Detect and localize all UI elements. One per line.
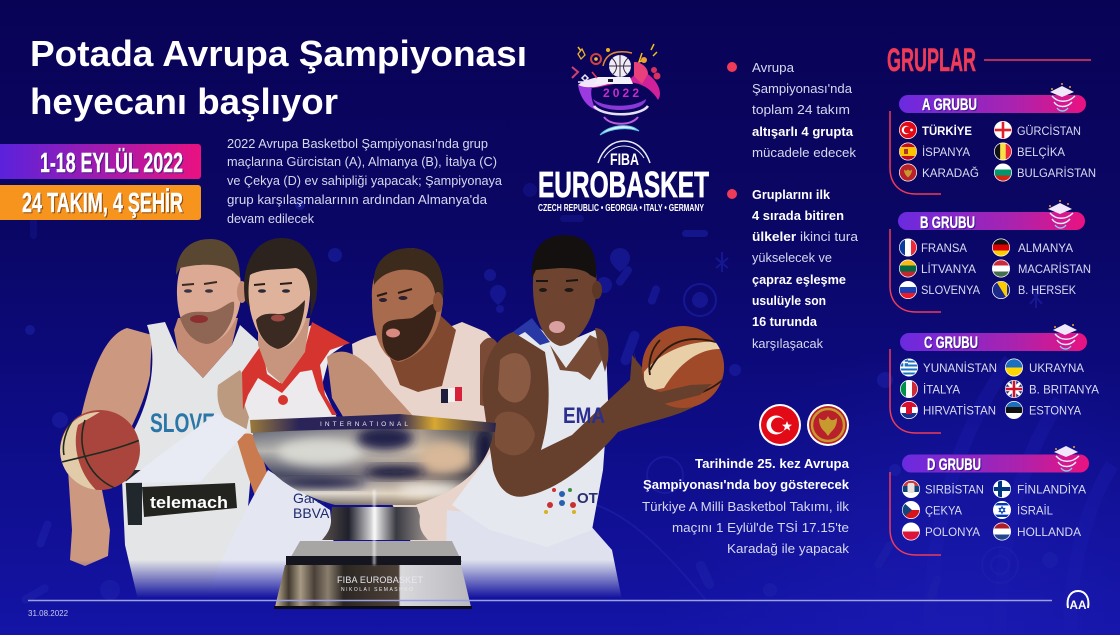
- date banner: [0, 144, 201, 179]
- logo text: EUROBASKET: [538, 164, 709, 205]
- team: Ukrayna: [1005, 358, 1084, 376]
- group C header: [900, 324, 1087, 352]
- team: B. Britanya: [1005, 380, 1099, 398]
- team: Macaristan: [992, 260, 1091, 278]
- team: Türkiye: [899, 121, 972, 139]
- team: Gürcistan: GÜRCİSTAN: [1017, 124, 1081, 138]
- team: Hırvatistan: [900, 401, 996, 419]
- jersey text: Garanti BBVA: BBVA: [293, 505, 330, 521]
- player: Gobert: [352, 248, 502, 560]
- title: [30, 33, 527, 122]
- trophy inscription: FIBA EUROBASKET: [337, 575, 424, 585]
- panel: group C: [890, 324, 1099, 433]
- group D header: D GRUBU: [927, 455, 981, 474]
- jersey text: SLOVE: [150, 408, 215, 438]
- team: Karadağ: [899, 164, 979, 182]
- team: Yunanistan: YUNANİSTAN: [923, 361, 997, 375]
- icon: Turkey flag: [759, 404, 801, 446]
- team: Polonya: POLONYA: [925, 525, 980, 539]
- logo mark: [572, 44, 660, 135]
- bullet text: second round: çapraz eşleşme: [752, 273, 846, 287]
- team: Bulgaristan: BULGARİSTAN: [1017, 166, 1096, 180]
- team: Litvanya: LİTVANYA: [921, 262, 976, 276]
- player: Antetokounmpo: OT: [577, 490, 598, 507]
- team: Almanya: ALMANYA: [1018, 241, 1073, 255]
- icon: AA logo: [1068, 591, 1088, 612]
- team: Litvanya: [899, 260, 976, 278]
- intro text: 2022 Avrupa Basketbol Şampiyonası'nda grup: [227, 137, 488, 151]
- sponsor dots: [544, 488, 576, 514]
- bullet text: second round: ülkeler ikinci tura: [752, 230, 858, 244]
- team: Bulgaristan: [994, 164, 1096, 182]
- intro text: grup karşılaşmalarının ardından Almanya'da: [227, 193, 487, 207]
- heading: groups: GRUPLAR: [887, 42, 976, 78]
- team: Hollanda: HOLLANDA: [1017, 525, 1081, 539]
- bullet text: second round: [727, 188, 858, 351]
- bullet text: second round: karşılaşacak: [752, 337, 824, 351]
- group C header: C GRUBU: [924, 333, 978, 352]
- match text: Tarihinde 25. kez Avrupa: [695, 457, 850, 471]
- sponsor band: telemach: [142, 483, 237, 517]
- team: Türkiye: TÜRKİYE: [922, 123, 972, 138]
- sponsor band: telemach: telemach: [150, 493, 228, 512]
- match text: [642, 457, 850, 556]
- title: heyecanı başlıyor: [30, 81, 338, 122]
- date banner: 1-18 EYLÜL 2022: [40, 147, 183, 178]
- group B header: [898, 200, 1085, 232]
- logo text: FIBA: [610, 151, 639, 169]
- team: Ukrayna: UKRAYNA: [1029, 361, 1084, 375]
- team: Macaristan: MACARİSTAN: [1018, 262, 1091, 276]
- bullet text: format: toplam 24 takım: [752, 103, 850, 117]
- group D header: [902, 446, 1089, 474]
- match text: maçını 1 Eylül'de TSİ 17.15'te: [672, 521, 849, 535]
- logo mark: 2022: [603, 86, 639, 100]
- team: Belçika: [994, 142, 1065, 160]
- basketball: right: [632, 326, 725, 410]
- bullet text: format: [727, 61, 857, 160]
- teams and cities banner: 24 TAKIM, 4 ŞEHİR: [22, 187, 183, 218]
- team: Almanya: [992, 238, 1073, 256]
- logo text: [538, 151, 709, 214]
- team: Polonya: [902, 522, 980, 540]
- team: Slovenya: SLOVENYA: [921, 283, 980, 297]
- player: Osman: [124, 238, 415, 600]
- group A header: [899, 83, 1086, 114]
- team: Karadağ: KARADAĞ: [922, 165, 979, 180]
- group B header: B GRUBU: [920, 213, 975, 232]
- team: Çekya: ÇEKYA: [925, 504, 962, 518]
- jersey text: Garanti BBVA: Gara: [293, 490, 324, 506]
- team: İtalya: [900, 380, 960, 398]
- team: Gürcistan: [994, 121, 1081, 139]
- team: İspanya: İSPANYA: [922, 145, 970, 159]
- team: Çekya: [902, 501, 962, 519]
- group A header: A GRUBU: [922, 95, 977, 114]
- bullet text: second round: 16 turunda: [752, 315, 818, 329]
- team: İtalya: İTALYA: [923, 382, 960, 396]
- team: Sırbistan: SIRBİSTAN: [925, 482, 984, 496]
- match text: Karadağ ile yapacak: [727, 542, 850, 556]
- player: Doncic: [68, 239, 262, 600]
- intro text: ve Çekya (D) ev sahipliği yapacak; Şampiyonaya: [227, 174, 502, 188]
- match text: Şampiyonası'nda boy gösterecek: [643, 478, 849, 492]
- team: İsrail: İSRAİL: [1017, 504, 1053, 518]
- bullet text: format: mücadele edecek: [752, 146, 857, 160]
- team: Estonya: [1005, 401, 1081, 419]
- jersey text: EMA: [563, 403, 605, 428]
- team: Slovenya: [899, 281, 980, 299]
- bullet text: format: Avrupa: [752, 61, 794, 75]
- team: İsrail: [993, 501, 1053, 519]
- team: Hollanda: [993, 522, 1081, 540]
- icon: Montenegro flag: [807, 404, 849, 446]
- bullet text: second round: yükselecek ve: [752, 251, 832, 265]
- trophy inscription: INTERNATIONAL: [320, 421, 410, 428]
- intro text: maçlarına Gürcistan (A), Almanya (B), İtalya (C): [227, 155, 497, 169]
- team: B. Britanya: B. BRITANYA: [1029, 382, 1099, 396]
- panel: group B: [890, 200, 1091, 312]
- team: Finlandiya: FİNLANDİYA: [1017, 482, 1086, 496]
- match text: Türkiye A Milli Basketbol Takımı, ilk: [642, 500, 850, 514]
- team: Finlandiya: [993, 480, 1086, 498]
- icon: French flag on jersey: [441, 387, 462, 403]
- trophy inscription: [320, 421, 424, 593]
- team: İspanya: [899, 142, 970, 160]
- intro text: devam edilecek: [227, 212, 315, 226]
- team: Fransa: FRANSA: [921, 241, 967, 255]
- trophy inscription: NIKOLAI SEMASHKO: [341, 587, 413, 593]
- team: Belçika: BELÇİKA: [1017, 145, 1065, 159]
- team: B. Hersek: B. HERSEK: [1018, 283, 1076, 297]
- team: Fransa: [899, 238, 967, 256]
- trophy: [250, 414, 496, 609]
- EuroBasket logo: [538, 44, 709, 214]
- team: Estonya: ESTONYA: [1029, 404, 1081, 418]
- basketball: left: [60, 410, 140, 490]
- panel: group D: [890, 446, 1089, 555]
- bullet text: second round: 4 sırada bitiren: [752, 209, 844, 223]
- date: 31.08.2022: [28, 609, 69, 618]
- bullet text: format: Şampiyonası'nda: [752, 82, 852, 96]
- teams and cities banner: [0, 185, 201, 220]
- team: B. Hersek: [992, 281, 1076, 299]
- panel: group A: [890, 83, 1096, 194]
- title: Potada Avrupa Şampiyonası: [30, 33, 527, 74]
- bullet text: second round: usulüyle son: [752, 294, 826, 308]
- logo text: CZECH REPUBLIC • GEORGIA • ITALY • GERMANY: [538, 203, 704, 214]
- bullet text: second round: Gruplarını ilk: [752, 188, 830, 202]
- jersey text: Garanti BBVA: [294, 494, 330, 518]
- players: [68, 235, 712, 600]
- player: Antetokounmpo: [445, 235, 712, 600]
- team: Sırbistan: [902, 480, 984, 498]
- icon: AA logo: AA: [1070, 600, 1086, 612]
- team: Hırvatistan: HIRVATİSTAN: [923, 404, 996, 418]
- team: Yunanistan: [900, 358, 997, 376]
- intro text: [227, 137, 502, 226]
- bullet text: format: altışarlı 4 grupta: [752, 125, 854, 139]
